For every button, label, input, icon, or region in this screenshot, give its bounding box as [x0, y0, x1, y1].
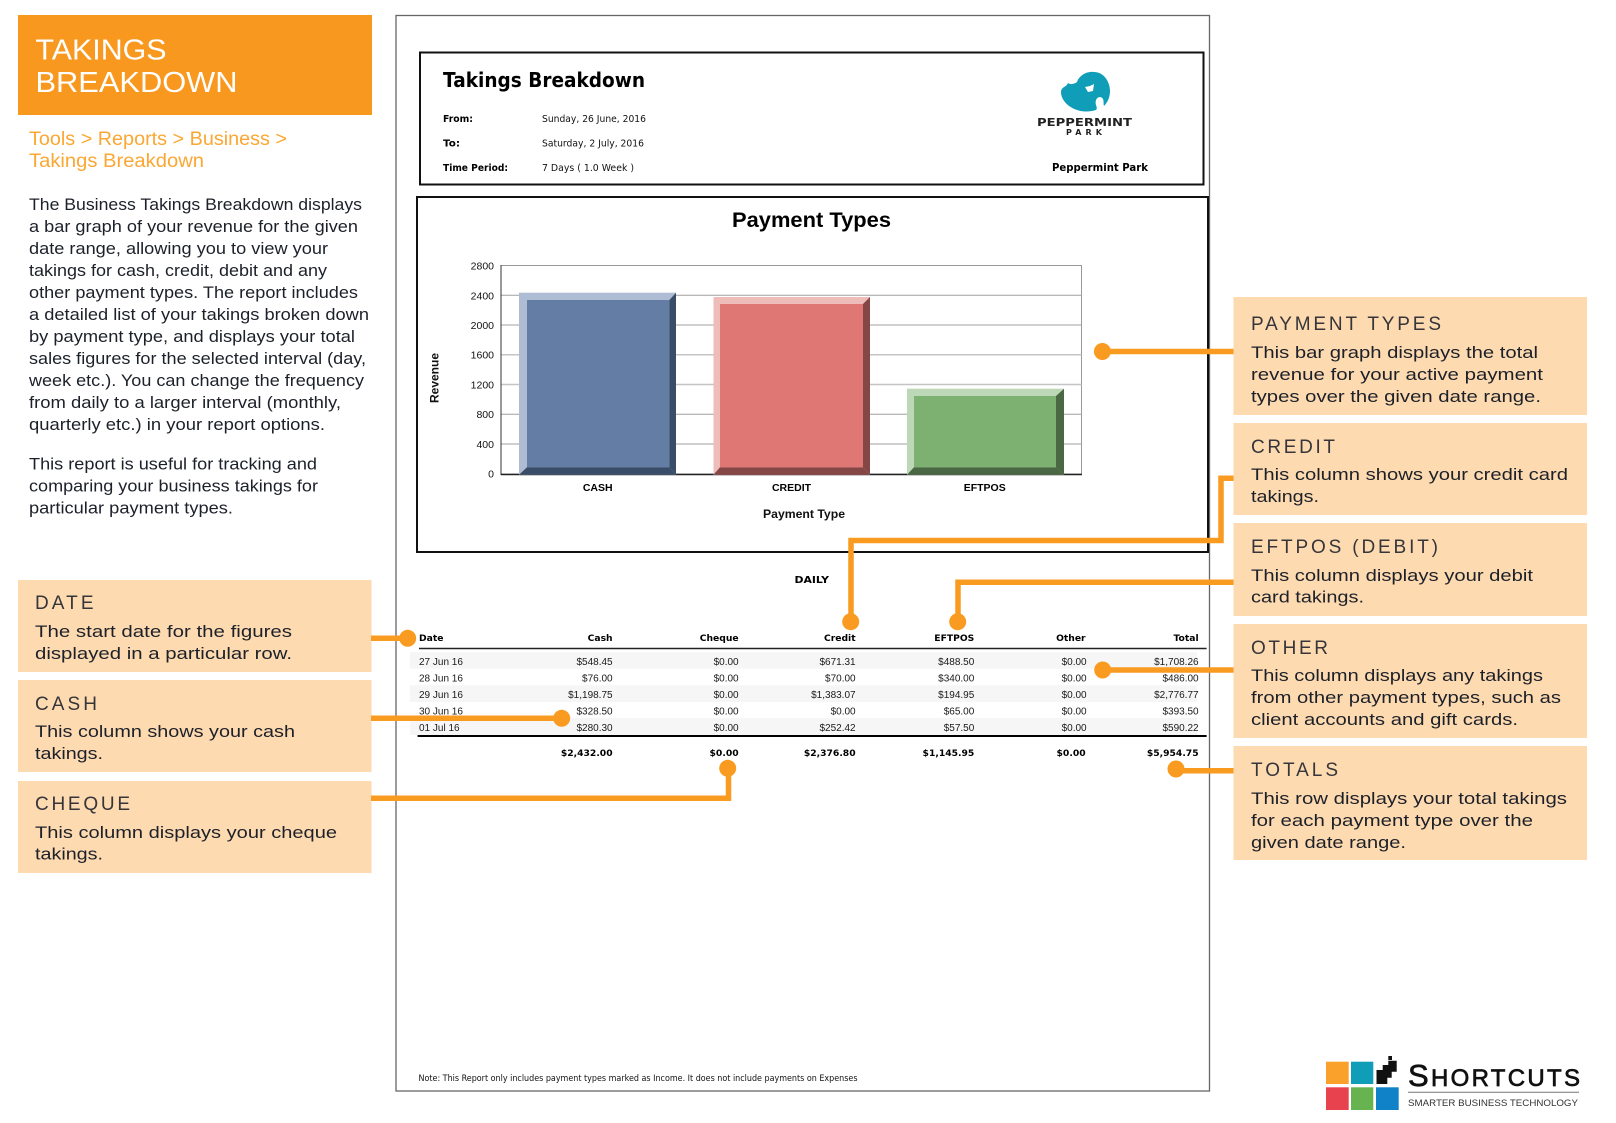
panel: report page [396, 16, 1210, 1091]
arrow: cash connector [371, 710, 570, 727]
callout: cash: CASH [35, 694, 97, 715]
table column headers: Cheque [700, 633, 739, 644]
category labels: CASH [583, 482, 613, 494]
axis tick labels: 800 [476, 409, 494, 421]
callout: totals [1234, 746, 1587, 860]
report header box [420, 52, 1204, 184]
table totals row: $0.00 [710, 748, 739, 759]
table row: 27 Jun 16: $0.00 [714, 657, 739, 668]
axis title: payment type: Payment Type [763, 509, 845, 521]
breadcrumb: Takings Breakdown [29, 151, 204, 172]
report date fields [443, 114, 646, 174]
callout: cheque: This column displays your cheque [35, 824, 337, 842]
arrow: eftpos connector [949, 582, 1234, 630]
description paragraph two: This report is useful for tracking and [29, 456, 317, 474]
table row: 30 Jun 16: $0.00 [1062, 706, 1087, 718]
callout: credit: This column shows your credit card [1251, 466, 1568, 484]
bar: credit [714, 297, 870, 475]
callout: other: client accounts and gift cards. [1251, 711, 1518, 729]
footnote: Note: This Report only includes payment types marked as Income. It does not include payments on Expenses [418, 1074, 858, 1084]
business name: Peppermint Park [1052, 162, 1149, 174]
callout: eftpos: This column displays your debit [1251, 567, 1534, 585]
axis tick labels: 0 [488, 468, 494, 480]
description paragraph one: a detailed list of your takings broken down [29, 306, 369, 324]
callout: cheque: CHEQUE [35, 794, 130, 815]
callout: credit: takings. [1251, 488, 1319, 506]
table row: 27 Jun 16: 27 Jun 16 [419, 657, 463, 668]
description paragraph one: quarterly etc.) in your report options. [29, 416, 325, 434]
callout: totals: This row displays your total takings [1251, 790, 1567, 808]
table row: 28 Jun 16 [419, 674, 1199, 684]
report date fields: 7 Days ( 1.0 Week ) [542, 163, 634, 174]
callout: date: displayed in a particular row. [35, 645, 292, 663]
callout: cheque [18, 781, 372, 873]
table column headers: Credit [824, 633, 856, 644]
table totals row: $1,145.95 [923, 748, 974, 759]
table row: 29 Jun 16: $0.00 [1062, 690, 1087, 701]
table column headers [419, 633, 1199, 644]
table row: 30 Jun 16 [419, 706, 1199, 718]
table totals row: $0.00 [1057, 748, 1086, 759]
callout: cash [18, 680, 372, 772]
description paragraph one: by payment type, and displays your total [29, 328, 355, 346]
axis tick labels: 1600 [471, 350, 494, 362]
breadcrumb [29, 129, 287, 172]
table row: 27 Jun 16 [419, 657, 1199, 668]
callout: totals: for each payment type over the [1251, 812, 1533, 830]
table totals row: $5,954.75 [1147, 748, 1199, 759]
table row: 30 Jun 16: $393.50 [1162, 706, 1199, 718]
table row: 29 Jun 16: $0.00 [714, 690, 739, 701]
axis title: revenue: Revenue [430, 353, 442, 403]
table row: 29 Jun 16: $1,383.07 [811, 690, 856, 701]
table column headers: Total [1173, 633, 1199, 644]
description paragraph one: sales figures for the selected interval (day, [29, 350, 366, 368]
category labels: EFTPOS [964, 482, 1006, 494]
table row: 28 Jun 16: $70.00 [825, 674, 856, 684]
callout: eftpos: card takings. [1251, 588, 1364, 606]
table row: 01 Jul 16: $57.50 [944, 723, 975, 734]
table row: 29 Jun 16: $194.95 [938, 690, 975, 701]
bar: cash [519, 293, 676, 475]
callout: other: from other payment types, such as [1251, 689, 1561, 707]
report date fields: Saturday, 2 July, 2016 [542, 138, 644, 150]
arrow: payment types connector [1094, 343, 1234, 360]
title banner: BREAKDOWN [36, 67, 238, 99]
callout: cash: This column shows your cash [35, 723, 295, 741]
callout: totals: given date range. [1251, 834, 1406, 852]
chart gridlines and axes [501, 265, 1082, 475]
table row: 30 Jun 16: $0.00 [831, 706, 856, 718]
axis tick labels [471, 260, 494, 480]
arrow: date connector [371, 630, 416, 647]
callout: payment types [1234, 297, 1587, 415]
panel: payment types chart [417, 197, 1208, 552]
description paragraph two: comparing your business takings for [29, 478, 319, 496]
callout: cash: takings. [35, 745, 103, 763]
callout: payment types: PAYMENT TYPES [1251, 314, 1441, 335]
callout: credit: CREDIT [1251, 437, 1335, 458]
table row: 01 Jul 16: $0.00 [714, 723, 739, 734]
table column headers: Cash [588, 633, 613, 644]
table totals row: $2,376.80 [804, 748, 856, 759]
icon: Shortcuts logo: SHORTCUTS [1408, 1058, 1580, 1093]
description paragraph one: The Business Takings Breakdown displays [29, 196, 362, 214]
table row: 01 Jul 16: 01 Jul 16 [419, 723, 460, 734]
description paragraph one: week etc.). You can change the frequency [28, 372, 365, 390]
table row: 28 Jun 16: $0.00 [1062, 674, 1087, 684]
title banner [18, 15, 372, 115]
callout: other: This column displays any takings [1251, 667, 1543, 685]
callout: eftpos [1234, 523, 1587, 616]
axis tick labels: 2000 [471, 320, 494, 332]
table heading: DAILY [794, 575, 830, 586]
callout: other: OTHER [1251, 638, 1328, 659]
description paragraph one [28, 196, 369, 434]
table row: 30 Jun 16: 30 Jun 16 [419, 706, 463, 718]
connectors [371, 343, 1234, 798]
table row: 28 Jun 16: 28 Jun 16 [419, 674, 463, 684]
report title: Takings Breakdown [443, 68, 645, 92]
table row: 28 Jun 16: $76.00 [582, 674, 613, 684]
table row: 27 Jun 16: $488.50 [938, 657, 975, 668]
table row: 27 Jun 16: $0.00 [1062, 657, 1087, 668]
callout: other [1234, 624, 1587, 738]
axis tick labels: 400 [476, 439, 494, 451]
table row: 01 Jul 16 [419, 723, 1199, 734]
callout: credit [1234, 423, 1587, 515]
arrow: cheque connector [371, 760, 736, 798]
table row: 01 Jul 16: $280.30 [576, 723, 613, 734]
report date fields: To: [443, 138, 460, 150]
callout: payment types: revenue for your active payment [1251, 366, 1543, 384]
callout: date: DATE [35, 593, 94, 614]
table row: 27 Jun 16: $671.31 [819, 657, 856, 668]
arrow: other connector [1094, 662, 1234, 678]
callout: date: The start date for the figures [35, 623, 292, 641]
table row: 30 Jun 16: $328.50 [576, 706, 613, 718]
axis tick labels: 2800 [471, 260, 494, 272]
table row: 28 Jun 16: $486.00 [1162, 674, 1199, 684]
table totals row: $2,432.00 [561, 748, 613, 759]
panel: left sidebar intro [18, 15, 372, 518]
table column headers: EFTPOS [934, 633, 974, 644]
axis tick labels: 2400 [471, 290, 494, 302]
description paragraph one: takings for cash, credit, debit and any [29, 262, 328, 280]
description paragraph one: date range, allowing you to view your [29, 240, 329, 258]
report date fields: Sunday, 26 June, 2016 [542, 114, 646, 125]
table row: 28 Jun 16: $0.00 [714, 674, 739, 684]
table row: 30 Jun 16: $0.00 [714, 706, 739, 718]
axis tick labels: 1200 [471, 380, 494, 392]
table row: 29 Jun 16: $2,776.77 [1154, 690, 1199, 701]
callout: payment types: types over the given date range. [1251, 388, 1541, 406]
report date fields: From: [443, 114, 473, 125]
breadcrumb: Tools > Reports > Business > [29, 129, 287, 150]
table row: 27 Jun 16: $1,708.26 [1154, 657, 1199, 668]
callout: date [18, 580, 372, 672]
icon: Peppermint Park logo [1037, 72, 1133, 137]
icon: Shortcuts logo [1326, 1056, 1580, 1110]
bar: eftpos [907, 389, 1064, 475]
table totals row [561, 748, 1199, 759]
icon: Peppermint Park logo: PARK [1066, 128, 1103, 137]
description paragraph two [29, 456, 319, 518]
callout: cheque: takings. [35, 846, 103, 864]
callout: eftpos: EFTPOS (DEBIT) [1251, 537, 1438, 558]
description paragraph one: a bar graph of your revenue for the given [29, 218, 358, 236]
table column headers: Other [1056, 633, 1086, 644]
table row: 01 Jul 16: $590.22 [1162, 723, 1199, 734]
callout: payment types: This bar graph displays the total [1251, 344, 1538, 362]
table row: 27 Jun 16: $548.45 [576, 657, 613, 668]
table row: 28 Jun 16: $340.00 [938, 674, 975, 684]
table row: 29 Jun 16: 29 Jun 16 [419, 690, 463, 701]
arrow: credit connector [842, 478, 1234, 630]
icon: Peppermint Park logo: PEPPERMINT [1037, 116, 1133, 129]
icon: Shortcuts logo: SMARTER BUSINESS TECHNOLOGY [1408, 1098, 1578, 1108]
arrow: totals connector [1168, 760, 1234, 778]
table column headers: Date [419, 633, 443, 644]
report date fields: Time Period: [443, 163, 508, 174]
table row: 30 Jun 16: $65.00 [944, 706, 975, 718]
description paragraph one: from daily to a larger interval (monthly, [29, 394, 341, 412]
table row: 01 Jul 16: $0.00 [1062, 723, 1087, 734]
table row: 29 Jun 16 [419, 690, 1199, 701]
callout: totals: TOTALS [1251, 760, 1338, 781]
table row: 29 Jun 16: $1,198.75 [568, 690, 613, 701]
description paragraph two: particular payment types. [29, 500, 233, 518]
category labels [583, 482, 1006, 494]
table row: 01 Jul 16: $252.42 [819, 723, 856, 734]
chart title: Payment Types [732, 209, 891, 232]
description paragraph one: other payment types. The report includes [29, 284, 358, 302]
title banner: TAKINGS [36, 34, 166, 66]
category labels: CREDIT [772, 482, 812, 494]
daily takings table [410, 633, 1207, 759]
